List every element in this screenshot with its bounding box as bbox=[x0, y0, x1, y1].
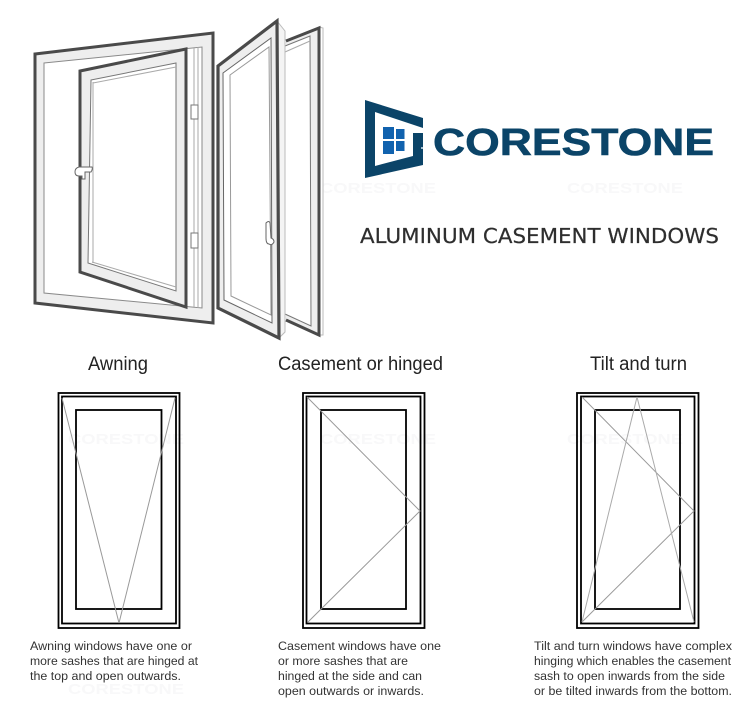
description: the top and open outwards. bbox=[30, 669, 181, 683]
watermarks: CORESTONE bbox=[68, 681, 184, 698]
title: ALUMINUM CASEMENT WINDOWS bbox=[360, 224, 719, 248]
heading: Awning bbox=[88, 354, 148, 375]
window diagram bbox=[58, 393, 180, 628]
watermarks: CORESTONE bbox=[68, 431, 184, 448]
description bbox=[534, 639, 733, 698]
panel: awning bbox=[30, 354, 199, 683]
open window left bbox=[35, 33, 213, 323]
window diagram bbox=[303, 393, 424, 628]
watermarks: CORESTONE bbox=[320, 431, 436, 448]
panel: casement or hinged bbox=[278, 354, 443, 698]
description: more sashes that are hinged at bbox=[30, 654, 199, 668]
open window right bbox=[218, 21, 323, 338]
window diagram bbox=[577, 393, 698, 628]
description: open outwards or inwards. bbox=[278, 684, 424, 698]
description: hinging which enables the casement bbox=[534, 654, 732, 668]
watermarks bbox=[68, 180, 683, 698]
watermarks: CORESTONE bbox=[567, 180, 683, 197]
watermarks: CORESTONE bbox=[320, 180, 436, 197]
description: Awning windows have one or bbox=[30, 639, 192, 653]
description: Tilt and turn windows have complex bbox=[534, 639, 733, 653]
watermarks: CORESTONE bbox=[567, 431, 683, 448]
description bbox=[30, 639, 199, 683]
description: or more sashes that are bbox=[278, 654, 408, 668]
description: or be tilted inwards from the bottom. bbox=[534, 684, 732, 698]
logo wordmark: CORESTONE bbox=[433, 122, 714, 164]
heading: Casement or hinged bbox=[278, 354, 443, 375]
heading: Tilt and turn bbox=[590, 354, 687, 375]
description: sash to open inwards from the side bbox=[534, 669, 725, 683]
description: hinged at the side and can bbox=[278, 669, 422, 683]
logo: corestone bbox=[365, 100, 714, 178]
description: Casement windows have one bbox=[278, 639, 441, 653]
panel: tilt and turn bbox=[534, 354, 733, 698]
logo mark bbox=[365, 100, 423, 178]
description bbox=[278, 639, 441, 698]
window illustration bbox=[35, 21, 323, 338]
